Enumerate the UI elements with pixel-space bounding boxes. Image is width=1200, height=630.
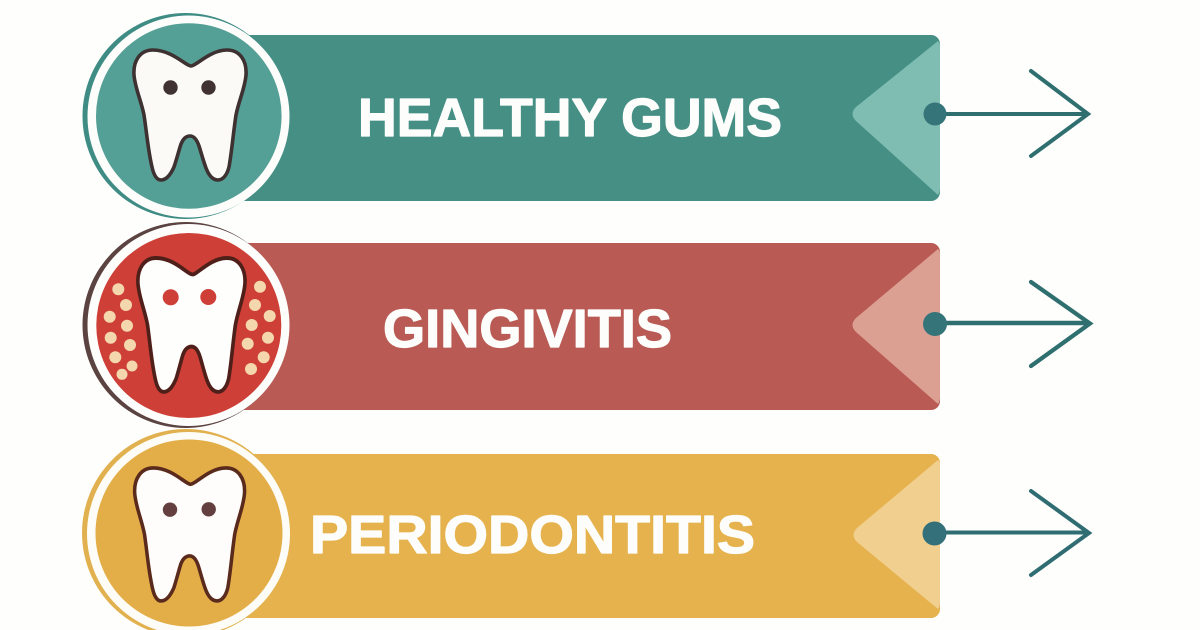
panel: gingivitis <box>82 222 1090 428</box>
banner notch: periodontitis <box>854 460 940 609</box>
arrow: periodontitis <box>922 491 1089 575</box>
icon: healthy tooth badge <box>82 13 290 219</box>
heading: periodontitis: PERIODONTITIS <box>310 505 755 565</box>
banner: healthy gums <box>200 35 940 201</box>
panel: periodontitis <box>82 429 1089 630</box>
panel: healthy gums <box>82 13 1088 219</box>
icon: inflamed tooth badge <box>82 222 290 428</box>
arrow: healthy gums <box>924 71 1088 156</box>
banner notch: healthy gums <box>852 41 940 195</box>
banner: periodontitis <box>200 454 940 618</box>
heading: gingivitis: GINGIVITIS <box>383 299 672 359</box>
arrow: gingivitis <box>923 282 1090 366</box>
banner notch: gingivitis <box>852 249 940 404</box>
banner: gingivitis <box>200 243 940 410</box>
heading: healthy gums: HEALTHY GUMS <box>358 88 782 148</box>
gum inflammation dots <box>104 281 276 380</box>
icon: periodontitis tooth badge <box>82 429 290 630</box>
